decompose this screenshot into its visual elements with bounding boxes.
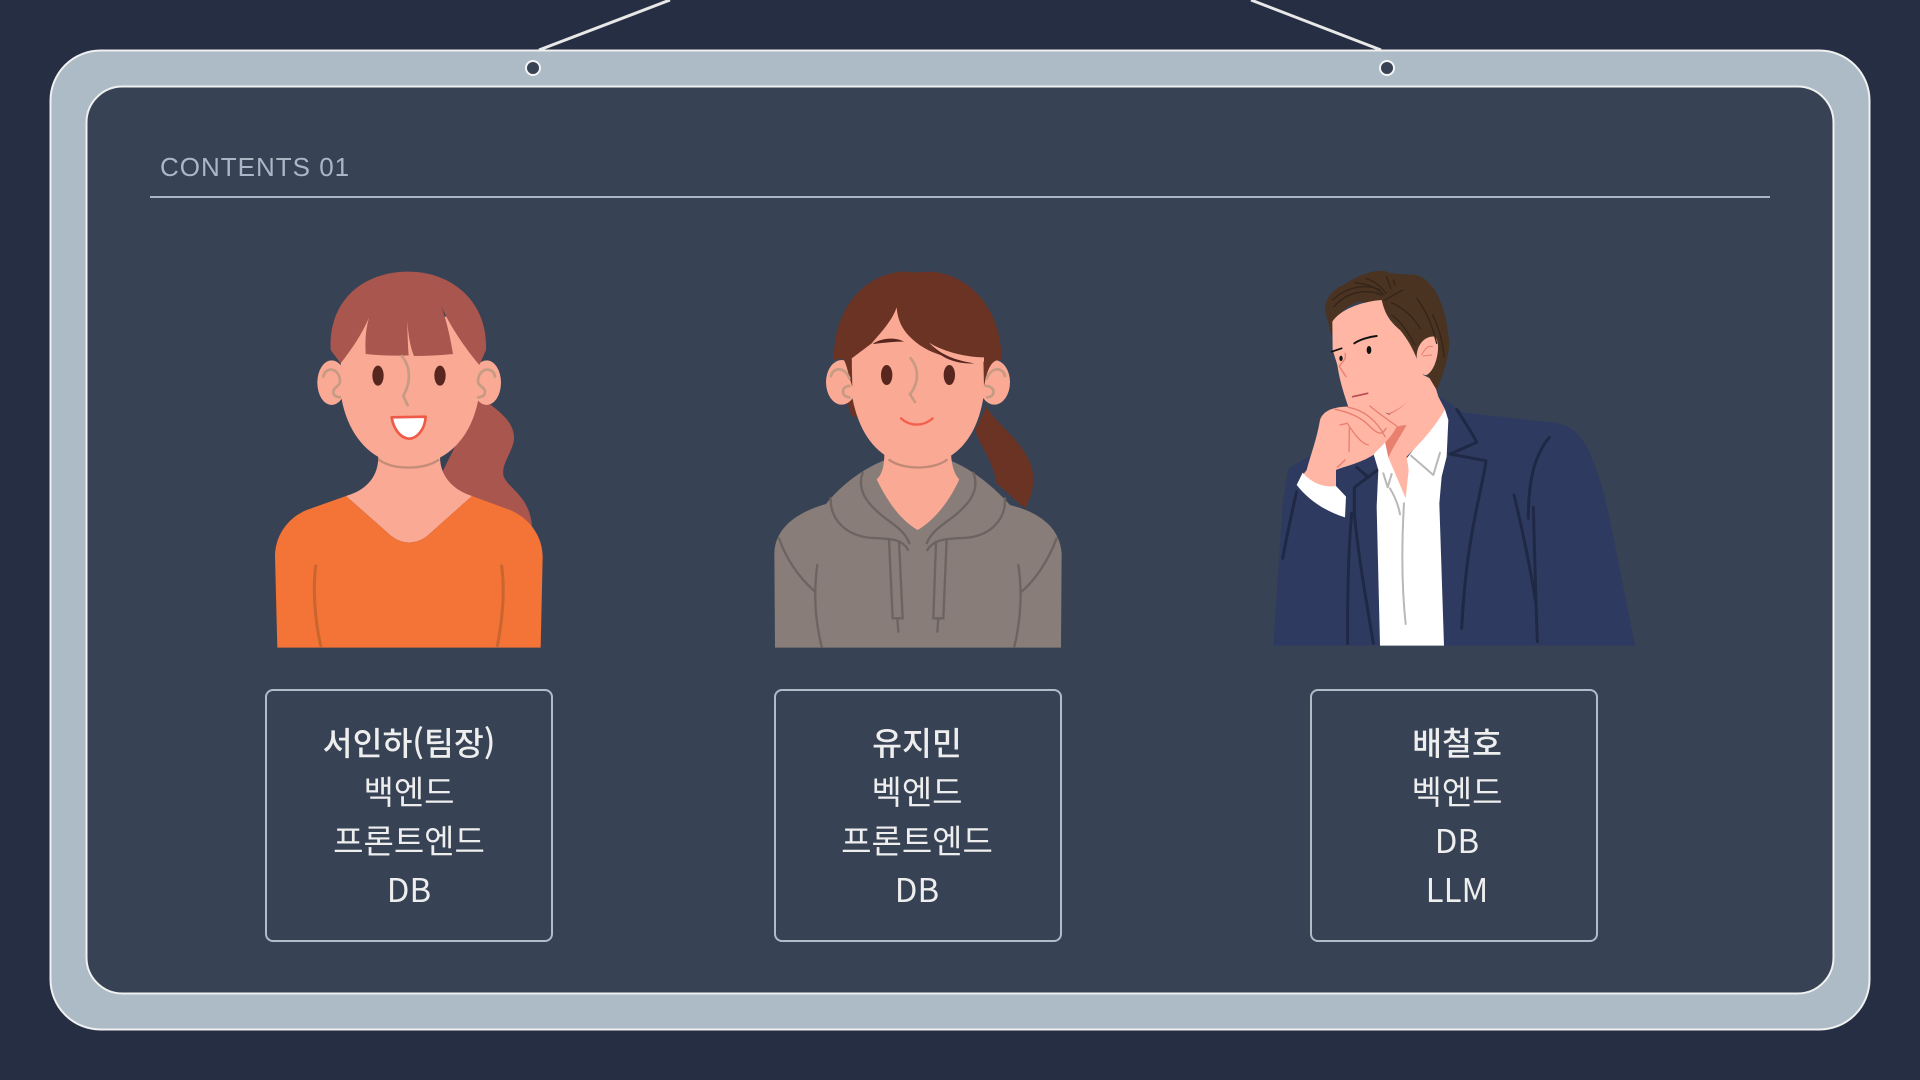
- role: backend: 벡엔드: [871, 766, 963, 814]
- role: frontend: 프론트엔드: [841, 815, 993, 863]
- panel: 유지민 role card: [774, 689, 1062, 942]
- role: DB: DB: [1435, 815, 1479, 863]
- role: DB: DB: [387, 864, 431, 912]
- role: LLM: LLM: [1426, 864, 1488, 912]
- mounting hole left: [526, 61, 540, 75]
- heading: CONTENTS 01: [160, 152, 350, 182]
- hanging wire left: [539, 0, 670, 50]
- hanging wire right: [1251, 0, 1381, 50]
- role: DB: DB: [895, 864, 939, 912]
- role: frontend: 프론트엔드: [333, 815, 485, 863]
- role: backend: 벡엔드: [1411, 766, 1503, 814]
- panel: 배철호 role card: [1310, 689, 1598, 942]
- mounting hole right: [1380, 61, 1394, 75]
- name: 유지민: [872, 718, 962, 765]
- name: 배철호: [1412, 718, 1502, 765]
- role: backend: 백엔드: [363, 766, 455, 814]
- panel: 서인하 role card: [265, 689, 553, 942]
- name: 서인하(팀장): [323, 718, 495, 765]
- inner board: [86, 86, 1834, 994]
- heading rule: [150, 196, 1770, 198]
